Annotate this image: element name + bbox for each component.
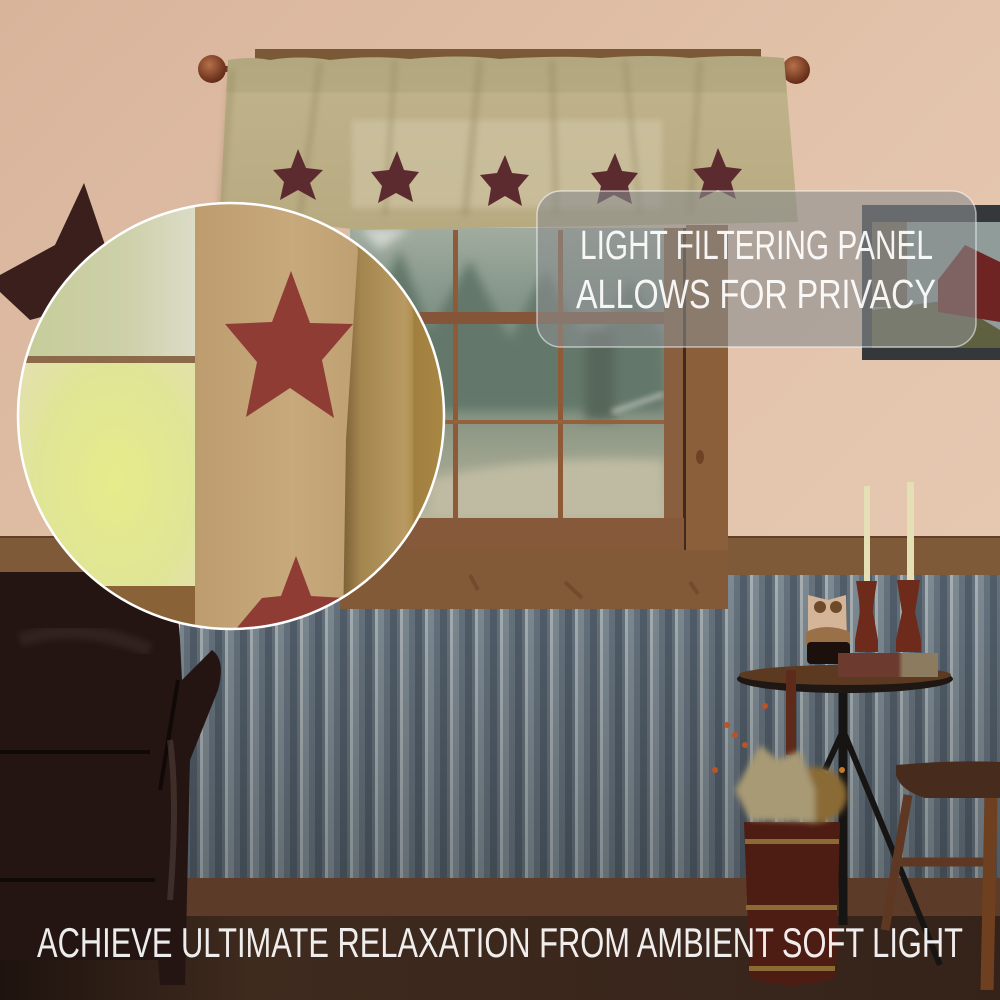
window sash bottom bbox=[405, 518, 684, 550]
wall star decoration bbox=[0, 183, 105, 320]
window casing right bbox=[686, 225, 728, 555]
rod finial left bbox=[198, 55, 226, 83]
table legs bbox=[838, 693, 848, 925]
window muntins bbox=[453, 230, 458, 518]
text callout panel bbox=[537, 191, 976, 347]
leather sofa bbox=[0, 572, 221, 985]
barrel bucket with dried flowers bbox=[712, 703, 847, 985]
baseboard bbox=[170, 878, 1000, 916]
framed picture bbox=[862, 205, 1000, 360]
floor bbox=[0, 916, 1000, 1000]
pleat shading bbox=[220, 60, 700, 215]
curtain rod bbox=[198, 49, 810, 84]
blurred forest trees bbox=[360, 228, 665, 518]
valance bbox=[220, 56, 798, 230]
dried flowers bbox=[735, 745, 847, 823]
rod finial right bbox=[782, 56, 810, 84]
sheer light patch bbox=[352, 120, 662, 208]
window sill bbox=[340, 550, 728, 609]
blurred window backdrop bbox=[19, 363, 195, 586]
side table bbox=[737, 665, 953, 965]
zoom detail circle bbox=[15, 200, 450, 630]
window bbox=[340, 225, 728, 609]
folded burlap bbox=[344, 246, 443, 596]
sash right bbox=[664, 228, 684, 550]
owl figurine and book bbox=[806, 595, 938, 677]
valance stars bbox=[273, 148, 742, 206]
lower star bbox=[235, 556, 345, 630]
window view bbox=[350, 228, 670, 520]
burlap panel bbox=[195, 200, 358, 630]
large star bbox=[225, 271, 353, 418]
corrugated metal wainscot bbox=[180, 575, 1000, 878]
wood chair rail bbox=[0, 536, 1000, 575]
candlesticks bbox=[855, 482, 921, 652]
wooden chair bbox=[885, 761, 1000, 990]
